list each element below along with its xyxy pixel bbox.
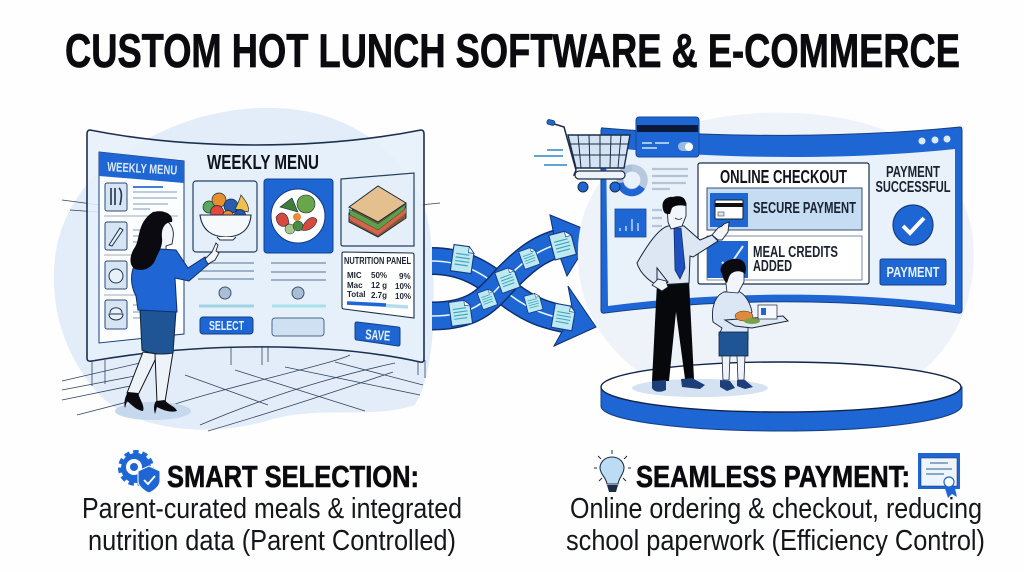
card: salad plate (selected): [264, 179, 333, 253]
circular platform: [601, 362, 962, 431]
heading: smart selection: SMART SELECTION:: [167, 459, 419, 494]
figure: child with lunch tray: [712, 259, 788, 391]
payment successful: PAYMENT: [886, 164, 940, 181]
nutrition panel: Total: [347, 290, 366, 299]
description: smart selection: nutrition data (Parent Controlled): [88, 525, 456, 557]
row: secure payment: SECURE PAYMENT: [753, 200, 856, 217]
description: seamless payment: school paperwork (Efficiency Control): [566, 525, 985, 557]
nutrition panel: [342, 252, 414, 318]
curved glass screen: [87, 130, 424, 362]
floor grid: [62, 200, 440, 431]
description: seamless payment: [566, 493, 985, 557]
browser window: [601, 127, 962, 313]
payment successful: [876, 164, 951, 245]
row: meal credits added: MEAL CREDITS: [753, 244, 838, 261]
card: sandwich: [341, 173, 414, 246]
icon: credit card: [636, 117, 699, 157]
donut chart: [620, 168, 644, 193]
button: payment: PAYMENT: [886, 264, 940, 281]
sidebar: weekly menu: [99, 152, 184, 343]
card: fruit bowl: [193, 181, 257, 252]
heading: seamless payment: SEAMLESS PAYMENT:: [636, 459, 910, 494]
payment successful: SUCCESSFUL: [876, 179, 951, 196]
button: blank: [272, 318, 324, 336]
caption: smart selection: [82, 453, 462, 557]
online checkout panel: ONLINE CHECKOUT: [720, 167, 847, 187]
text lines: [652, 169, 688, 226]
nutrition panel: NUTRITION PANEL: [344, 256, 411, 267]
figure: father pointing: [637, 196, 729, 392]
nutrition panel: 2.7g: [371, 291, 387, 300]
button: select: [200, 317, 253, 334]
icon: gear with shield: [121, 453, 160, 493]
icon: certificate: [918, 453, 960, 498]
button: save: [355, 322, 400, 346]
description: smart selection: [82, 493, 462, 557]
bar chart tile: [615, 209, 646, 237]
row: meal credits added: ADDED: [753, 258, 792, 275]
caption: seamless payment: [566, 450, 985, 557]
nutrition panel: 9%: [399, 272, 411, 281]
card sliders: [198, 263, 326, 306]
nutrition panel: MIC: [347, 271, 362, 280]
nutrition panel: 10%: [395, 292, 411, 301]
nutrition panel: 50%: [371, 271, 387, 280]
button: payment: [880, 259, 946, 285]
background blob: [578, 113, 974, 395]
nutrition panel: 10%: [395, 282, 411, 291]
heading: weekly menu: WEEKLY MENU: [207, 152, 319, 174]
button: select: SELECT: [209, 318, 244, 333]
icon: shopping cart: [534, 119, 630, 192]
panel: seamless payment illustration: [534, 113, 974, 431]
description: smart selection: Parent-curated meals & integrated: [82, 493, 462, 525]
sidebar: weekly menu: WEEKLY MENU: [107, 159, 178, 178]
arrows: crossing document flows: [432, 215, 596, 346]
nutrition panel: Mac: [347, 281, 363, 290]
icon: light bulb: [594, 450, 631, 492]
background blob: [54, 108, 434, 430]
nutrition panel: 12 g: [371, 281, 387, 290]
panel: smart selection illustration: [54, 108, 440, 431]
row: meal credits added: [707, 236, 862, 280]
row: secure payment: [707, 188, 862, 230]
button: save: SAVE: [365, 326, 391, 344]
online checkout panel: [698, 163, 869, 284]
figure: woman pointing at menu: [115, 211, 219, 420]
